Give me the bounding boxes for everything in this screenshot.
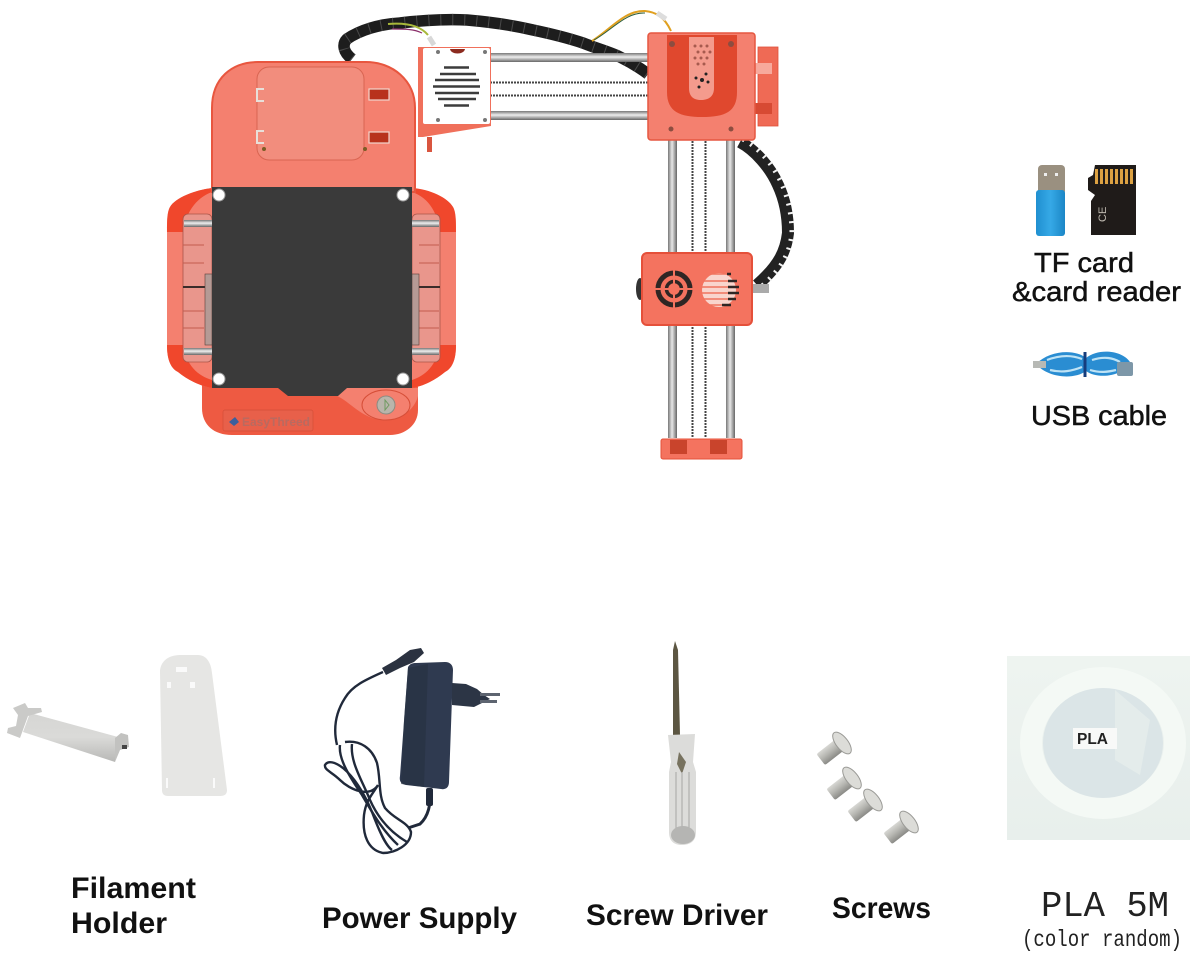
printer bbox=[167, 11, 792, 459]
main body bbox=[212, 62, 415, 192]
label: Filament Holder bbox=[71, 872, 196, 940]
PLA filament pack bbox=[1007, 656, 1190, 840]
screw 3 bbox=[844, 786, 886, 827]
bottom foot bbox=[661, 439, 742, 459]
screw 2 bbox=[823, 764, 865, 805]
label: Screw Driver: Screw Driver bbox=[586, 899, 768, 932]
screws bbox=[813, 729, 922, 849]
TF card and reader group bbox=[1034, 165, 1136, 278]
heated bed bbox=[212, 187, 412, 396]
side wing left bbox=[167, 188, 212, 388]
motor mount top bbox=[648, 33, 778, 140]
label: Power Supply: Power Supply bbox=[322, 902, 517, 935]
screw driver bbox=[668, 641, 696, 845]
cord bbox=[325, 672, 411, 853]
screw 4 bbox=[880, 808, 922, 849]
label: USB cable: USB cable bbox=[1031, 400, 1167, 431]
Y axis rods bbox=[668, 138, 735, 438]
cable chain: top bbox=[344, 20, 648, 74]
screw 1 bbox=[813, 729, 855, 770]
icon: USB cable bbox=[1033, 352, 1133, 377]
extruder fan head bbox=[418, 47, 491, 152]
brand badge: EasyThreed bbox=[242, 415, 310, 429]
icon: card reader bbox=[1036, 165, 1065, 236]
plug tip bbox=[382, 648, 424, 675]
label: Filament Holder: Filament bbox=[71, 872, 196, 905]
wires: green and yellow bbox=[388, 11, 671, 45]
cable chain: right bbox=[740, 139, 792, 288]
label: Screws: Screws bbox=[832, 892, 931, 925]
label: PLA 5M: PLA 5M bbox=[1041, 886, 1169, 927]
bracket slots bbox=[166, 667, 215, 788]
label: card reader: &card reader bbox=[1012, 276, 1181, 307]
power button recess bbox=[330, 388, 418, 420]
label: Filament Holder: Holder bbox=[71, 907, 167, 940]
base plate lower housing bbox=[202, 385, 418, 435]
power supply bbox=[325, 648, 500, 853]
filament holder spindle bbox=[7, 703, 129, 762]
icon: TF card: CE bbox=[1097, 207, 1109, 222]
PLA tag bbox=[1073, 728, 1117, 749]
label: TF card: TF card bbox=[1034, 247, 1134, 278]
fan carriage bbox=[636, 253, 769, 325]
brand badge bbox=[223, 410, 313, 431]
filament holder bracket bbox=[160, 655, 227, 796]
X axis rods bbox=[490, 53, 648, 120]
side wing right bbox=[412, 188, 456, 388]
PLA tag: PLA bbox=[1077, 731, 1108, 748]
plug prongs bbox=[452, 683, 490, 707]
adapter bbox=[400, 662, 453, 789]
